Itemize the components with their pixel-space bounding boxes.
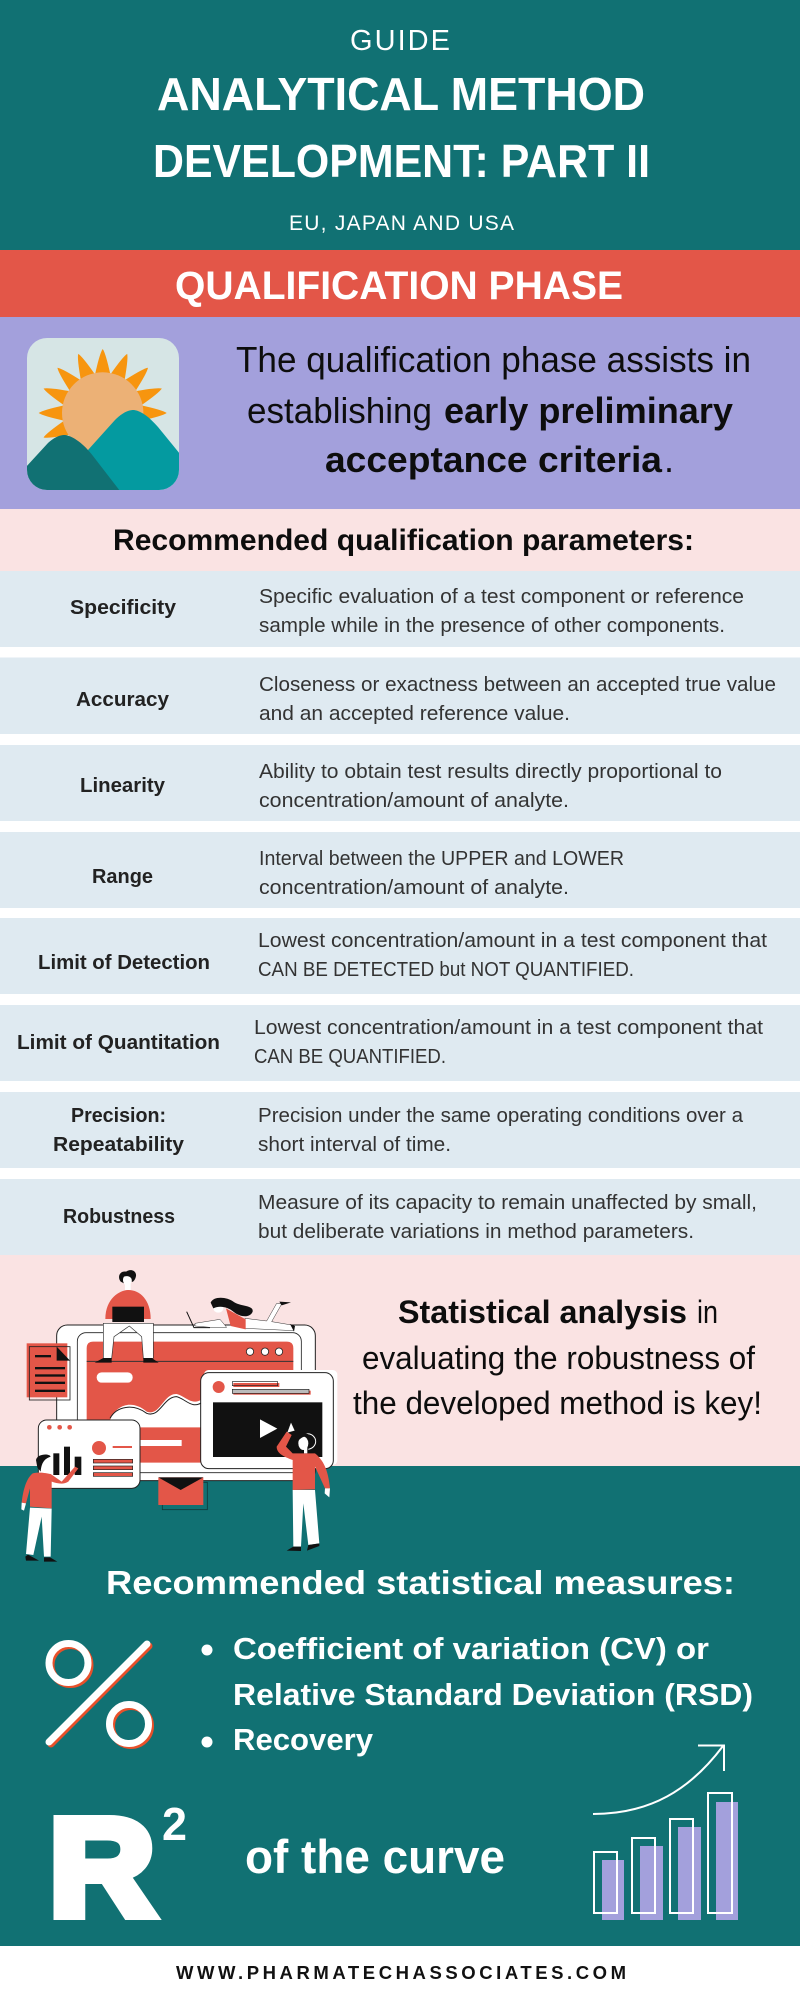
row: precision repeatability: Precision: (71, 1105, 166, 1127)
row: limit of detection: CAN BE DETECTED but NOT QUANTIFIED. (258, 959, 634, 981)
row: limit of quantitation: Lowest concentration/amount in a test component that (254, 1017, 763, 1039)
text: intro statement (236, 339, 751, 480)
list: statistical measures: Coefficient of variation (CV) or (233, 1631, 709, 1666)
row: specificity: sample while in the presence of other components. (259, 615, 725, 637)
row: accuracy: Accuracy (76, 689, 170, 711)
row: limit of detection: Lowest concentration/amount in a test component that (258, 930, 767, 952)
text: intro statement: . (664, 439, 674, 480)
row: limit of detection (0, 918, 800, 994)
row: limit of quantitation (0, 1005, 800, 1081)
row: linearity (0, 745, 800, 821)
text: intro statement: acceptance criteria (325, 439, 663, 480)
eyebrow: guide: GUIDE (350, 25, 450, 57)
row: precision repeatability: Precision under the same operating conditions over a (258, 1105, 744, 1127)
panel: qualification phase banner: QUALIFICATION PHASE (175, 264, 623, 308)
text: of the curve: of the curve (245, 1830, 505, 1883)
row: limit of quantitation: Limit of Quantitation (17, 1032, 220, 1054)
row: specificity: Specificity (70, 597, 177, 619)
panel: footer: WWW.PHARMATECHASSOCIATES.COM (176, 1962, 626, 1983)
subtitle: regions: EU, JAPAN AND USA (289, 212, 514, 235)
row: precision repeatability (0, 1092, 800, 1168)
row: accuracy (0, 658, 800, 734)
icon: percent sign (49, 1644, 150, 1746)
row: range (0, 832, 800, 908)
row: limit of quantitation: CAN BE QUANTIFIED. (254, 1046, 446, 1068)
row: range: Range (92, 866, 153, 888)
row: linearity: Linearity (80, 775, 166, 797)
row: robustness: but deliberate variations in method parameters. (258, 1221, 694, 1243)
row: precision repeatability: short interval of time. (258, 1134, 451, 1156)
row: range: concentration/amount of analyte. (259, 877, 569, 899)
panel: footer (0, 1946, 800, 2000)
list: statistical measures (202, 1631, 753, 1757)
illustration: team working around dashboard (21, 1270, 337, 1562)
title (153, 68, 650, 187)
row: robustness: Measure of its capacity to remain unaffected by small, (258, 1192, 757, 1214)
symbol: R squared: R (49, 1791, 155, 1945)
chart icon: rising bars with arrow (593, 1746, 738, 1920)
text: statistical analysis statement: Statistical analysis (398, 1294, 687, 1330)
icon: sun behind mountains (25, 338, 180, 491)
row: limit of detection: Limit of Detection (38, 952, 210, 974)
title: DEVELOPMENT: PART II (153, 135, 650, 187)
panel: qualification phase banner (0, 250, 800, 317)
text: intro statement: early preliminary (444, 390, 733, 431)
title: ANALYTICAL METHOD (157, 68, 645, 120)
text: statistical analysis statement: the developed method is key! (353, 1385, 762, 1421)
row: robustness: Robustness (63, 1206, 175, 1228)
text: statistical analysis statement: evaluating the robustness of (362, 1340, 755, 1376)
row: precision repeatability: Repeatability (53, 1134, 185, 1156)
row: accuracy: Closeness or exactness between an accepted true value (259, 674, 776, 696)
panel: statistical analysis callout (0, 1255, 800, 1466)
heading: recommended statistical measures: Recommended statistical measures: (106, 1564, 735, 1601)
text: intro statement: The qualification phase assists in (236, 339, 751, 380)
row: linearity: concentration/amount of analyte. (259, 790, 569, 812)
panel: intro (0, 317, 800, 509)
row: robustness (0, 1179, 800, 1255)
panel: parameters heading (0, 509, 800, 571)
row: accuracy: and an accepted reference value. (259, 703, 570, 725)
text: statistical analysis statement (353, 1294, 762, 1421)
symbol: R squared: 2 (162, 1798, 187, 1850)
text: intro statement: establishing (247, 390, 432, 431)
row: range: Interval between the UPPER and LOWER (259, 848, 624, 870)
list: statistical measures: Recovery (233, 1722, 374, 1757)
panel: statistical measures background (0, 1466, 800, 1946)
row: specificity: Specific evaluation of a test component or reference (259, 586, 744, 608)
row: linearity: Ability to obtain test results directly proportional to (259, 761, 722, 783)
text: statistical analysis statement: in (697, 1294, 718, 1330)
list: statistical measures: Relative Standard Deviation (RSD) (233, 1677, 753, 1712)
panel: parameters heading: Recommended qualification parameters: (113, 524, 694, 557)
panel: header (0, 0, 800, 250)
row: specificity (0, 571, 800, 647)
